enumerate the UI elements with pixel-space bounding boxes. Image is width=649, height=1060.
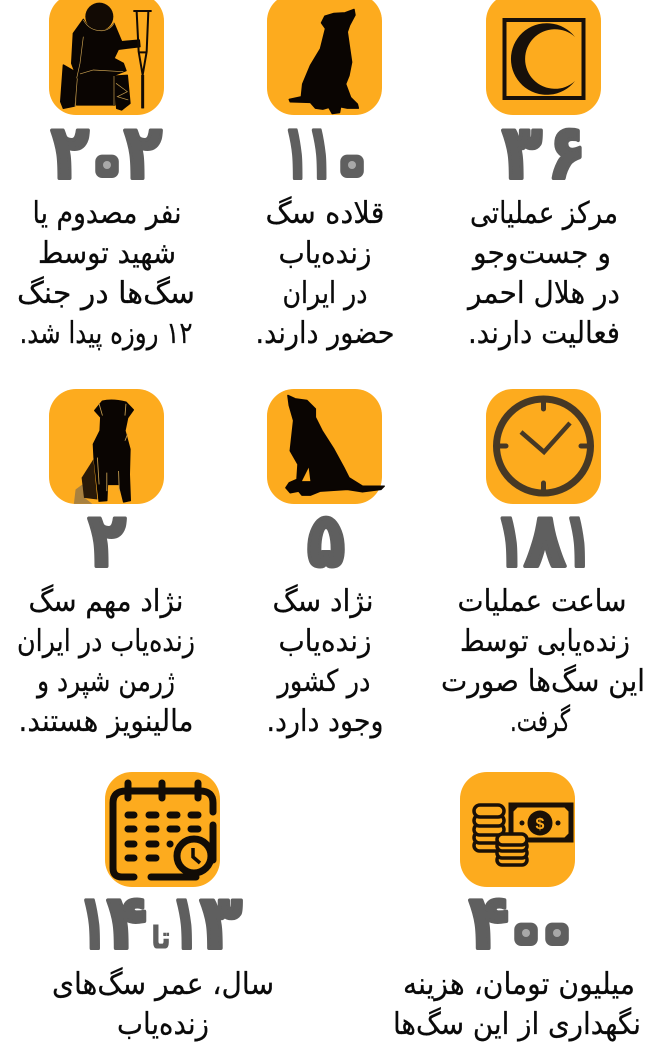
icon: calendar with clock bbox=[105, 772, 220, 887]
number: 400 bbox=[469, 878, 574, 966]
text: 2 description: مالینویز هستند. bbox=[18, 704, 194, 739]
number: 400: ۴ bbox=[469, 878, 509, 966]
text: 110 description: حضور دارند. bbox=[256, 316, 394, 351]
number: 13 to 14 bbox=[79, 878, 242, 966]
number: 400: ۰ bbox=[540, 898, 574, 962]
text: 181 description: ساعت عملیات bbox=[458, 584, 626, 619]
text: lifespan description: زنده‌یاب bbox=[117, 1007, 209, 1042]
number: 202: ۲ bbox=[51, 108, 89, 196]
text: 5 description: زنده‌یاب bbox=[278, 624, 372, 659]
number: 13 to 14: تا bbox=[152, 921, 170, 956]
panel: operation hours bbox=[441, 389, 645, 739]
number: 36: ۳ bbox=[502, 108, 542, 196]
icon: crescent in square bbox=[486, 0, 601, 115]
panel: five breeds bbox=[266, 389, 384, 739]
icon: sitting dog looking up bbox=[267, 0, 382, 115]
number: 36: ۶ bbox=[548, 108, 586, 196]
text: 110 description: در ایران bbox=[282, 276, 368, 311]
text: 202 description: ۱۲ روزه پیدا شد. bbox=[20, 316, 192, 351]
text: 202 description: شهید توسط bbox=[38, 236, 176, 271]
text: 202 description bbox=[17, 196, 195, 351]
number: 202: ۲ bbox=[124, 108, 162, 196]
text: 5 description: نژاد سگ bbox=[272, 584, 374, 619]
text: 5 description bbox=[266, 584, 384, 739]
text: lifespan description: سال، عمر سگ‌های bbox=[52, 967, 274, 1002]
text: 202 description: نفر مصدوم یا bbox=[32, 196, 182, 231]
text: 110 description: زنده‌یاب bbox=[278, 236, 372, 271]
number: 36 bbox=[502, 108, 586, 196]
number: 110: ۰ bbox=[335, 130, 369, 194]
text: 2 description: زنده‌یاب در ایران bbox=[17, 624, 195, 659]
number: 13 to 14: ۱ bbox=[79, 878, 107, 966]
number: 110 bbox=[283, 108, 369, 196]
panel: two main breeds bbox=[17, 389, 195, 739]
icon: dog front view bbox=[49, 389, 164, 504]
panel: rescue dog collars bbox=[256, 0, 394, 351]
icon: clock bbox=[486, 389, 601, 504]
number: 400: ۰ bbox=[509, 898, 543, 962]
number: 181: ۱ bbox=[564, 496, 592, 584]
text: 36 description: مرکز عملیاتی bbox=[470, 196, 618, 231]
text: 5 description: وجود دارد. bbox=[266, 704, 384, 739]
text: 2 description bbox=[17, 584, 195, 739]
text: 36 description: فعالیت دارند. bbox=[468, 316, 620, 351]
text: 36 description: در هلال احمر bbox=[466, 276, 620, 311]
number: 181: ۱ bbox=[495, 496, 525, 584]
text: 5 description: در کشور bbox=[276, 664, 370, 699]
text: 36 description: و جست‌وجو bbox=[471, 236, 611, 271]
text: cost description: میلیون تومان، هزینه bbox=[403, 967, 635, 1002]
number: 5: ۵ bbox=[307, 496, 345, 584]
text: 181 description bbox=[441, 584, 645, 739]
text: 36 description bbox=[466, 196, 620, 351]
text: 181 description: زنده‌یابی توسط bbox=[460, 624, 630, 659]
number: 202: ۰ bbox=[90, 130, 124, 194]
icon: injured person with crutch bbox=[49, 0, 164, 115]
number: 13 to 14: ۳ bbox=[200, 878, 242, 966]
text: 110 description bbox=[256, 196, 394, 351]
number: 110: ۱ bbox=[283, 108, 309, 196]
number: 13 to 14: ۱ bbox=[171, 878, 199, 966]
number: 13 to 14: ۴ bbox=[107, 878, 147, 966]
text: 181 description: گرفت. bbox=[510, 704, 571, 739]
icon: cash and coins: $ bbox=[536, 816, 545, 833]
text: cost description bbox=[393, 967, 641, 1042]
number: 2: ۲ bbox=[88, 496, 126, 584]
panel: lifespan bbox=[52, 772, 274, 1042]
number: 181 bbox=[495, 496, 592, 584]
number: 110: ۱ bbox=[307, 108, 333, 196]
text: 2 description: نژاد مهم سگ bbox=[28, 584, 184, 619]
text: 2 description: ژرمن شپرد و bbox=[35, 664, 175, 699]
text: lifespan description bbox=[52, 967, 274, 1042]
icon: sitting dog in profile bbox=[267, 389, 384, 504]
text: 202 description: سگ‌ها در جنگ bbox=[17, 276, 195, 311]
text: 110 description: قلاده سگ bbox=[266, 196, 384, 231]
panel: red crescent centers bbox=[466, 0, 620, 351]
panel: injured people found bbox=[17, 0, 195, 351]
number: 202 bbox=[51, 108, 162, 196]
number: 181: ۸ bbox=[524, 496, 566, 584]
panel: upkeep cost bbox=[393, 772, 641, 1042]
icon: cash and coins bbox=[460, 772, 575, 887]
